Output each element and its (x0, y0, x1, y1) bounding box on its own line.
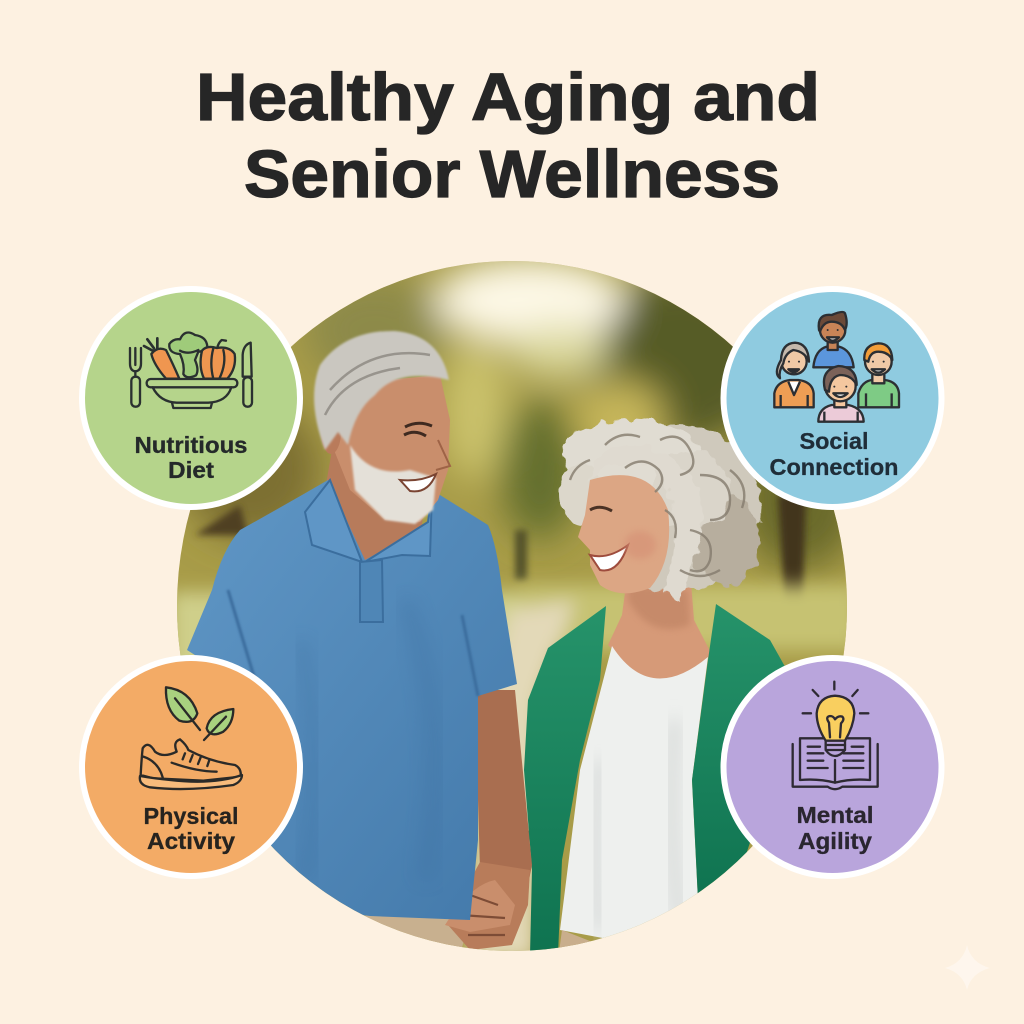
badge circle green (82, 289, 300, 507)
man arm (478, 690, 532, 877)
woman white top (560, 646, 708, 945)
badge: social connection (724, 289, 942, 507)
label: social connection (770, 428, 898, 480)
person left (774, 380, 814, 407)
woman neck and chest (608, 588, 710, 678)
woman hair back (560, 420, 760, 592)
icon: group of four people (774, 312, 899, 422)
badge circle blue (724, 289, 942, 507)
icon: sparkle watermark (945, 945, 990, 990)
badge circle orange (82, 658, 300, 876)
badge circle purple (724, 658, 942, 876)
badge: physical activity (82, 658, 300, 876)
title: Senior Wellness (244, 137, 780, 212)
person top (813, 347, 854, 367)
title: Healthy Aging and (196, 60, 820, 135)
badge: mental agility (724, 658, 942, 876)
title (196, 60, 820, 212)
label: mental agility (796, 802, 874, 854)
man beard (350, 445, 436, 524)
woman green cardigan (524, 606, 606, 955)
label: nutritious diet (134, 432, 248, 483)
icon: sneaker and leaves (140, 687, 242, 789)
label: social connection: Connection (770, 454, 898, 480)
label: nutritious diet: Diet (168, 457, 214, 483)
woman (524, 418, 784, 950)
woman front hair (663, 526, 702, 602)
man neck (326, 452, 422, 560)
woman face (578, 475, 669, 593)
label: mental agility: Agility (798, 828, 872, 854)
woman trousers (560, 930, 590, 948)
park background (170, 255, 860, 960)
person front (818, 405, 864, 422)
label: social connection: Social (800, 428, 868, 454)
label: mental agility: Mental (796, 802, 874, 828)
label: physical activity: Physical (144, 803, 238, 829)
man smile (400, 474, 436, 491)
man collar (305, 480, 362, 562)
man trousers (365, 915, 464, 947)
label: physical activity (144, 803, 238, 854)
label: nutritious diet: Nutritious (134, 432, 248, 458)
person right (858, 380, 899, 407)
man (187, 331, 532, 955)
man hair (314, 331, 449, 450)
label: physical activity: Activity (147, 828, 235, 854)
badge: nutritious diet (82, 289, 300, 507)
clasped hands (448, 862, 530, 950)
man head (330, 375, 450, 522)
icon: vegetable plate with cutlery (130, 332, 252, 408)
photo: senior couple in park (170, 255, 860, 960)
man blue polo shirt (187, 480, 517, 920)
icon: light bulb and open book (793, 682, 878, 789)
